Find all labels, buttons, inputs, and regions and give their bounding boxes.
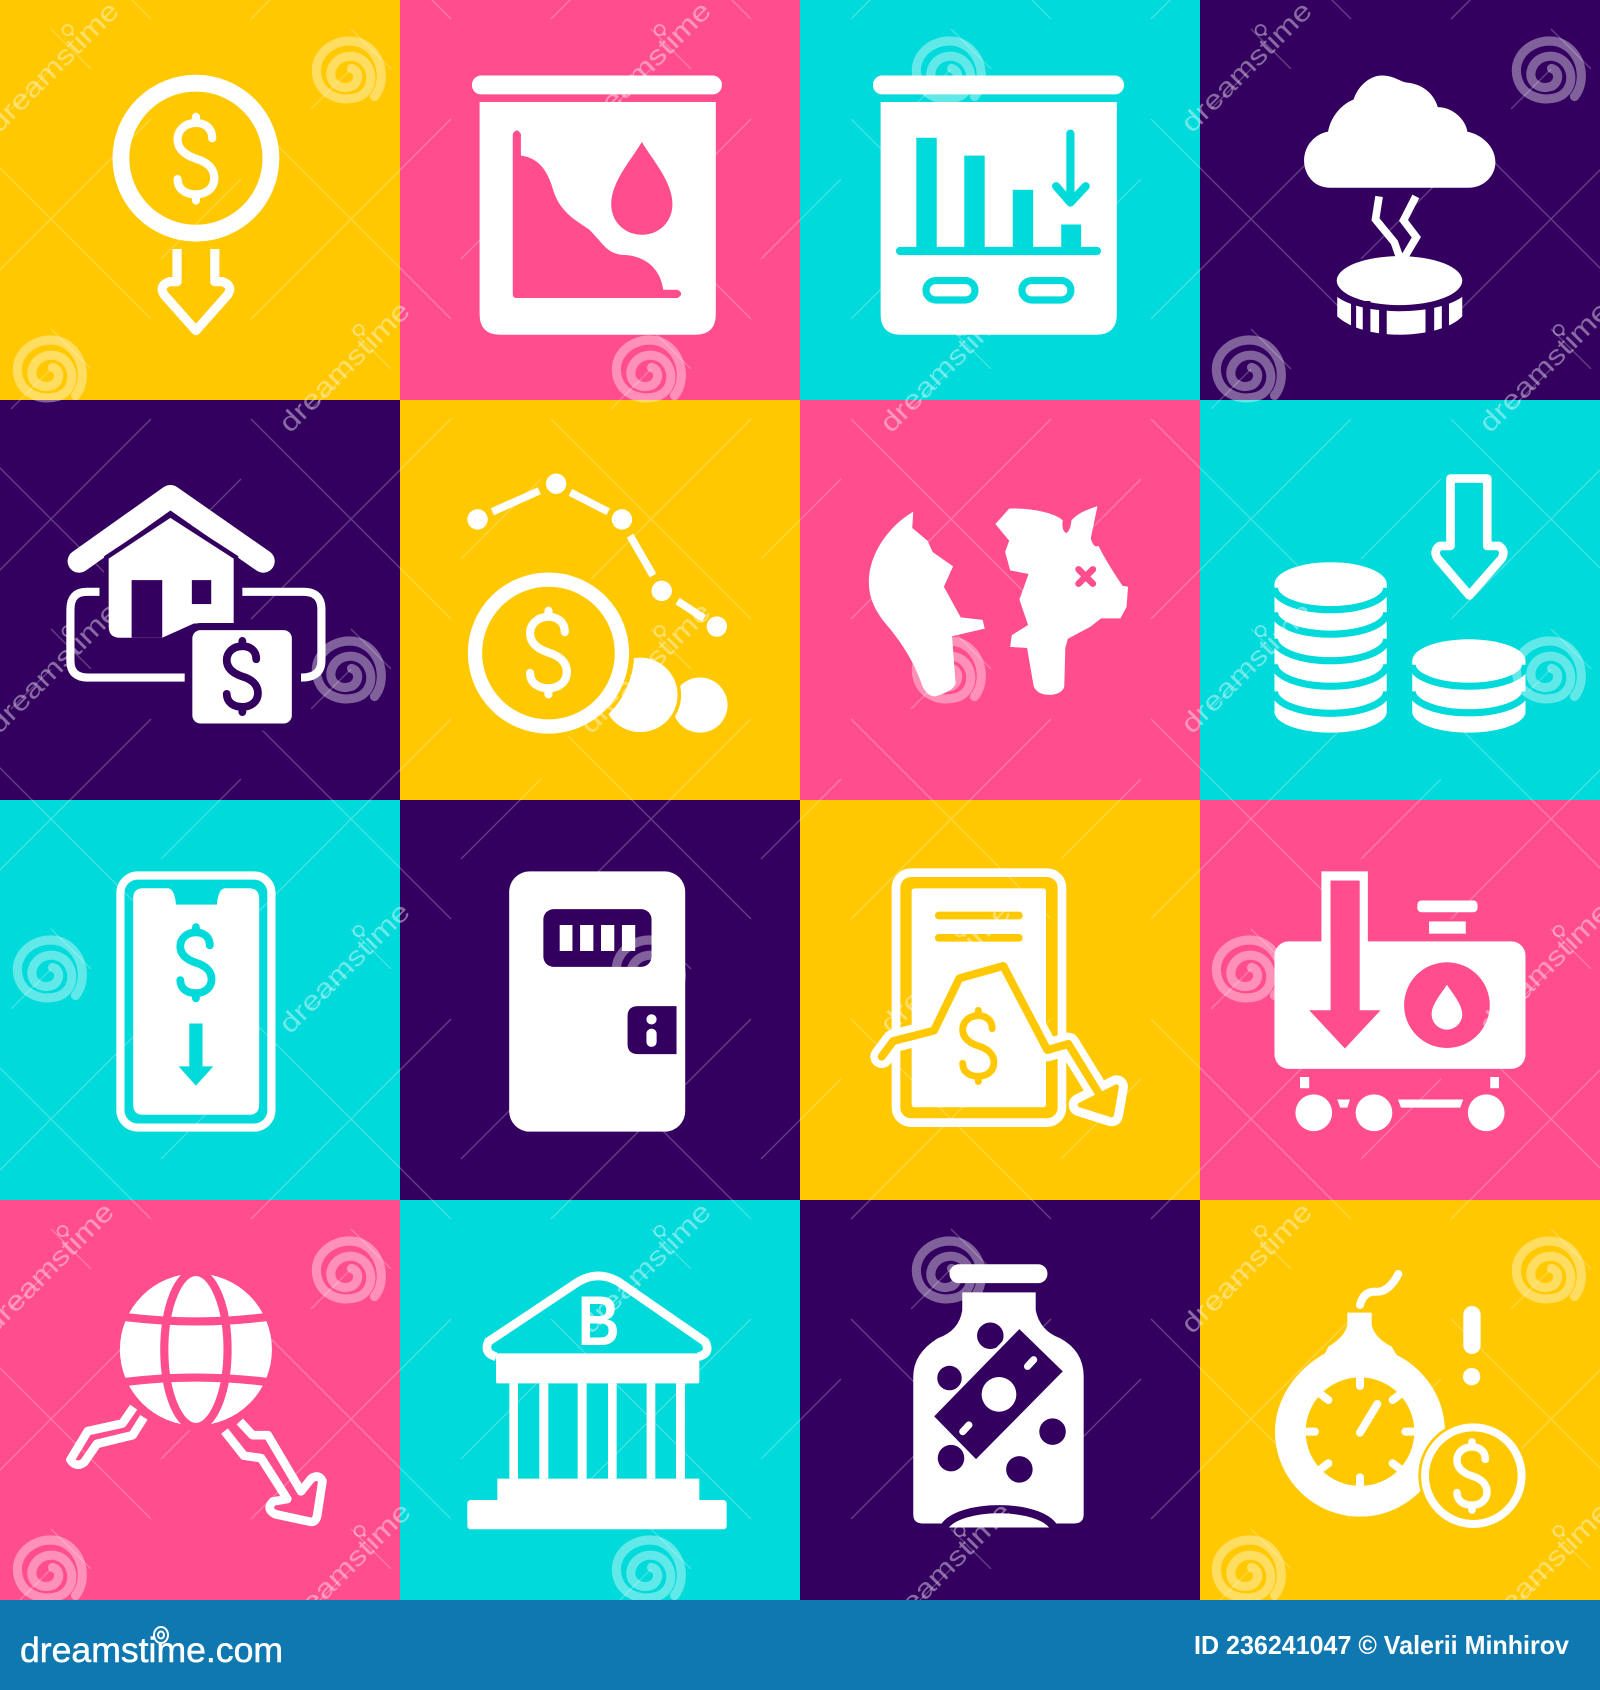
- footer logo text: dreamstime.com: [20, 1631, 283, 1670]
- icon: falling bar chart board: [873, 76, 1124, 335]
- icon: document with falling trend: [882, 873, 1117, 1123]
- icon: utility meter: [509, 871, 685, 1132]
- icon: globe with falling arrows: [70, 1272, 322, 1522]
- watermark text: dreamstime: [574, 596, 717, 739]
- icon: phone with falling dollar: [120, 876, 271, 1128]
- icon: storm cloud striking coin: [1304, 76, 1495, 337]
- icon: oil price chart board: [472, 76, 722, 335]
- watermark text: dreamstime: [1473, 295, 1600, 438]
- watermark text: dreamstime: [874, 896, 1017, 1039]
- watermark text: dreamstime: [1175, 0, 1318, 138]
- watermark text: dreamstime: [1473, 896, 1600, 1039]
- footer logo spiral: [154, 1627, 168, 1643]
- icon: bomb with timer and coin: [1275, 1274, 1528, 1531]
- icon: broken piggy bank: [869, 506, 1128, 696]
- watermark text: dreamstime: [1175, 1196, 1318, 1339]
- icon: coin stacks with down arrow: [1274, 479, 1526, 733]
- icon: house with money: [70, 496, 321, 723]
- footer bar: [0, 1600, 1600, 1690]
- icon: oil tanker wagon with down arrow: [1274, 876, 1526, 1131]
- watermark text: dreamstime: [874, 295, 1017, 438]
- image credit: ID 236241047 © Valerii Minhirov: [1194, 1630, 1570, 1660]
- watermark text: dreamstime: [1175, 596, 1318, 739]
- icon: coin with down arrow: [121, 83, 271, 331]
- watermark text: dreamstime: [273, 295, 416, 438]
- watermark text: dreamstime: [273, 896, 416, 1039]
- icon: jar with banknote and coins: [913, 1264, 1084, 1528]
- watermark text: dreamstime: [574, 0, 717, 138]
- watermark text: dreamstime: [1473, 1496, 1600, 1639]
- bank letter: B: [578, 1282, 620, 1360]
- icon: falling dotted line and coins: [463, 473, 728, 739]
- watermark text: dreamstime: [574, 1196, 717, 1339]
- icon: bank building: [467, 1276, 727, 1529]
- watermark text: dreamstime: [874, 1496, 1017, 1639]
- watermark text: dreamstime: [274, 1496, 417, 1639]
